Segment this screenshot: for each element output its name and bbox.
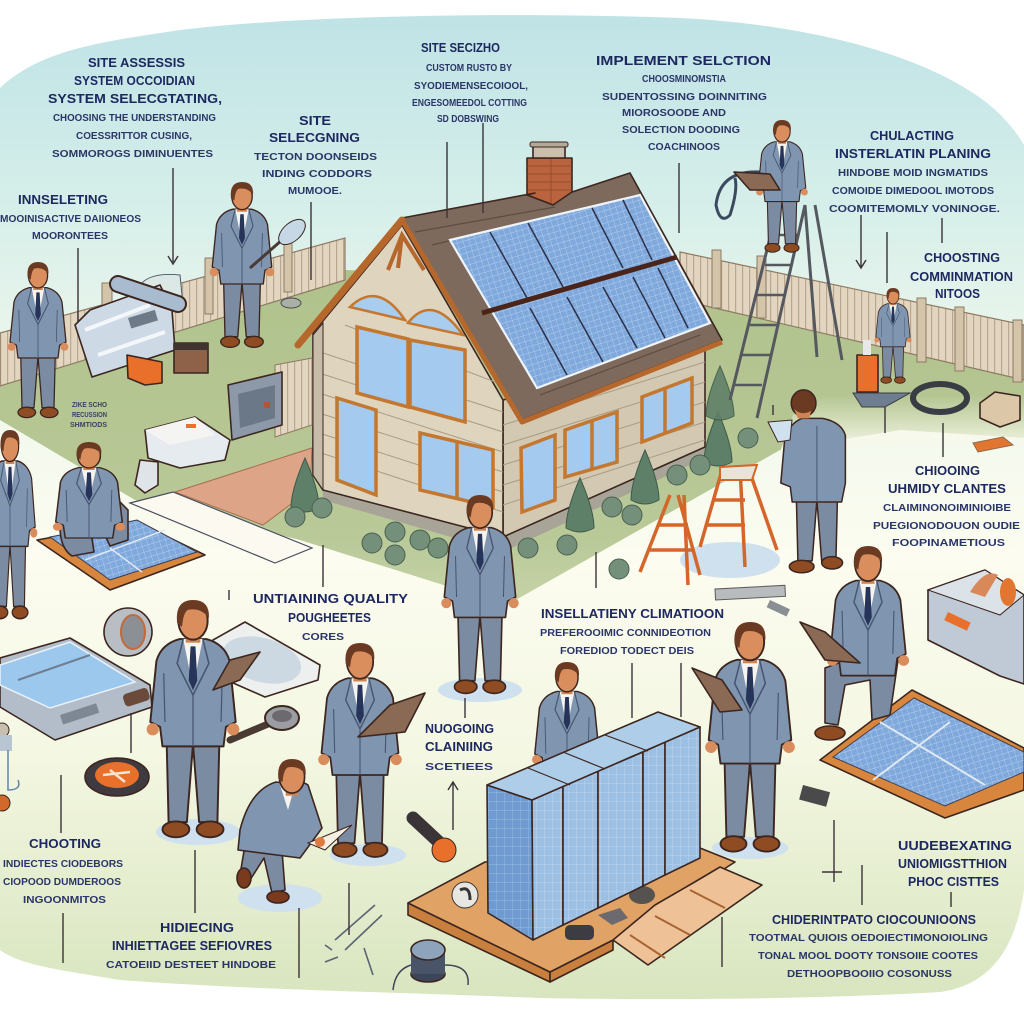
text block: maintaining quality: CORES	[302, 631, 344, 643]
text block: understanding: PHOC CISTTES	[908, 875, 999, 889]
house front wall	[313, 225, 503, 537]
crouching worker	[237, 759, 352, 903]
text block: implement selection: MIOROSOODE AND	[622, 107, 726, 119]
text block: conducting installation planning: INSTERLATIN PLANING	[835, 147, 991, 161]
text block: conducting installation planning: CHULACTING	[870, 129, 954, 143]
text block: nuogoing cleaning: SCETIEES	[425, 761, 493, 773]
worker behind panels	[532, 662, 602, 772]
text block: conducting installation planning: COMOIDE DIMEDOOL IMOTODS	[832, 185, 994, 197]
text block: conducting installation planning: HINDOBE MOID INGMATIDS	[838, 167, 988, 179]
stacked solar panels	[487, 712, 700, 940]
text block: site selecting: INDING CODDORS	[262, 168, 372, 180]
gable struts	[388, 235, 424, 270]
text block: choosing communication needs	[910, 251, 1013, 301]
text block: conducting installation planning: COOMITEMOMLY VONINOGE.	[829, 203, 1000, 215]
text block: installation climate: INSELLATIENY CLIMATIOON	[541, 607, 724, 621]
text block: implement selection: SUDENTOSSING DOINNITING	[602, 91, 767, 103]
text block: site seizing: SITE SECIZHO	[421, 41, 500, 55]
text block: site assessment: SYSTEM SELECGTATING,	[48, 92, 222, 106]
foundation gravel	[323, 445, 705, 552]
text block: site seizing	[412, 41, 528, 125]
cable reel	[393, 940, 468, 990]
inverter box left	[0, 638, 152, 740]
worker with magnifier	[210, 182, 310, 347]
text block: choosing utility clamps: PUEGIONODOUON OUDIE	[873, 520, 1020, 532]
text block: site assessment: SYSTEM OCCOIDIAN	[74, 74, 195, 88]
text block: understanding: UUDEBEXATING	[898, 839, 1012, 853]
worker on ladder	[716, 120, 808, 252]
left edge tool	[0, 723, 19, 811]
side note text near equipment: ZIKE SCHO	[72, 402, 107, 409]
text block: site assessment: COESSRITTOR CUSING,	[76, 130, 192, 142]
text block: site assessment: SITE ASSESSIS	[88, 56, 185, 70]
house side wall	[503, 345, 705, 537]
text block: site seizing: SD DOBSWING	[437, 113, 499, 125]
text block: conditions and costs: TONAL MOOL DOOTY TONSOIIE COOTES	[758, 950, 978, 962]
text block: site selecting: SELECGNING	[269, 131, 360, 145]
front windows	[337, 327, 493, 507]
kneeling workers	[53, 442, 909, 903]
ground solar panel right	[820, 690, 1024, 818]
foot shadows	[156, 678, 788, 912]
wooden base	[408, 848, 762, 982]
kneeling worker left	[53, 442, 128, 556]
text block: site assessment: SOMMOROGS DIMINUENTES	[52, 148, 213, 160]
house	[298, 142, 722, 552]
text block: choosing bottom left: INDIECTES CIODEBORS	[3, 858, 123, 870]
text block: choosing communication needs: CHOOSTING	[924, 251, 1000, 265]
text block: choosing utility clamps: UHMIDY CLANTES	[888, 482, 1006, 496]
text block: maintaining quality: POUGHEETES	[288, 611, 371, 625]
centre worker	[441, 495, 519, 693]
annotation lines	[61, 123, 951, 978]
text block: hidiecing inheritance: CATOEIID DESTEET HINDOBE	[106, 959, 276, 971]
walkway slab	[130, 492, 312, 563]
orange disc	[85, 758, 149, 796]
text block: conditions and costs: TOOTMAL QUIOIS OEDOIECTIMONOIOLING	[749, 932, 988, 944]
flashlight	[413, 818, 456, 862]
text block: conditions and costs: CHIDERINTPATO CIOCOUNIOONS	[772, 913, 976, 927]
fence: right	[680, 250, 1024, 382]
text block: installing	[0, 193, 141, 242]
wrench	[230, 706, 299, 740]
worker with clipboard C	[692, 622, 795, 852]
text block: site assessment	[48, 56, 222, 160]
text block: hidiecing inheritance	[106, 921, 276, 971]
kneeling worker with clipboard	[800, 546, 909, 740]
upper arched windows	[350, 296, 463, 335]
cable roll	[104, 608, 152, 656]
text block: installing: MOOINISACTIVE DAIIONEOS	[0, 213, 141, 225]
text block: choosing bottom left	[3, 837, 123, 906]
text block: installation climate: PREFEROOIMIC CONNIDEOTION	[540, 627, 711, 639]
ground solar panel left	[37, 520, 205, 590]
text block: understanding	[898, 839, 1012, 889]
text block: conditions and costs: DETHOOPBOOIIO COSONUSS	[787, 968, 952, 980]
text block: conditions and costs	[749, 913, 988, 980]
text block: choosing utility clamps: CHIOOING	[915, 464, 980, 478]
worker far right	[857, 288, 912, 392]
battery box right	[928, 570, 1024, 684]
text block: installing: INNSELETING	[18, 193, 108, 207]
text block: choosing utility clamps: FOOPINAMETIOUS	[892, 537, 1005, 549]
worker far left	[8, 262, 68, 418]
site stand	[281, 298, 301, 308]
solar panels on roof	[450, 195, 710, 388]
small scrap parts right	[715, 585, 830, 807]
text block: choosing communication needs: COMMINMATION	[910, 270, 1013, 284]
text block: nuogoing cleaning: CLAINIING	[425, 740, 493, 754]
text block: nuogoing cleaning: NUOGOING	[425, 722, 494, 736]
text block: hidiecing inheritance: HIDIECING	[160, 921, 234, 935]
garden path	[175, 448, 312, 525]
text block: installation climate	[540, 607, 724, 657]
white basin	[213, 622, 320, 697]
printer and monitor units	[135, 358, 312, 493]
roof	[402, 173, 722, 420]
text block: implement selection: IMPLEMENT SELCTION	[596, 54, 771, 68]
text block: site assessment: CHOOSING THE UNDERSTANDING	[53, 112, 216, 124]
shrubs	[285, 366, 758, 579]
text block: maintaining quality	[253, 592, 409, 643]
chimney	[527, 142, 572, 205]
text block: implement selection: COACHINOOS	[648, 141, 720, 153]
text block: site seizing: SYODIEMENSECOIOOL,	[414, 80, 528, 92]
side windows	[521, 378, 692, 512]
workers: standing	[0, 120, 912, 857]
worker with clipboard B	[318, 643, 425, 857]
worker with clipboard A	[147, 600, 260, 837]
text block: choosing utility clamps	[873, 464, 1020, 549]
text block: choosing bottom left: CIOPOOD DUMDEROOS	[3, 876, 121, 888]
text block: site selecting: MUMOOE.	[288, 185, 342, 197]
text block: choosing bottom left: INGOONMITOS	[23, 894, 106, 906]
text block: choosing utility clamps: CLAIMINONOIMINIOIBE	[883, 502, 1011, 514]
lawn	[0, 270, 1024, 605]
text block: site seizing: CUSTOM RUSTO BY	[426, 62, 512, 74]
text block: maintaining quality: UNTIAINING QUALITY	[253, 592, 409, 606]
text block: site selecting: SITE	[299, 114, 331, 128]
tools near base	[325, 905, 382, 975]
worker left edge	[0, 430, 37, 619]
big ladder	[730, 205, 842, 418]
text block: site seizing: ENGESOMEEDOL COTTING	[412, 97, 527, 109]
worker reading right	[768, 390, 845, 573]
text block: site selecting	[254, 114, 377, 197]
text block: site selecting: TECTON DOONSEIDS	[254, 151, 377, 163]
text block: implement selection: CHOOSMINOMSTIA	[642, 73, 726, 85]
text block: conducting installation planning	[829, 129, 1000, 215]
side note text near equipment: RECUSSION	[72, 412, 107, 419]
text block: implement selection	[596, 54, 771, 153]
side note text near equipment: SHMTIODS	[70, 422, 107, 429]
text block: hidiecing inheritance: INHIETTAGEE SEFIOVRES	[112, 939, 272, 953]
side note text near equipment	[70, 402, 107, 429]
text block: nuogoing cleaning	[425, 722, 494, 773]
text block: understanding: UNIOMIGSTTHION	[898, 857, 1007, 871]
yard supplies right	[853, 384, 1020, 452]
text block: installing: MOORONTEES	[32, 230, 108, 242]
fence: left	[0, 236, 345, 386]
orange step ladders	[640, 465, 780, 585]
text block: installation climate: FOREDIOD TODECT DEIS	[560, 645, 694, 657]
gable fascia	[298, 220, 402, 345]
equipment cluster	[75, 274, 208, 385]
text block: choosing bottom left: CHOOTING	[29, 837, 101, 851]
text block: choosing communication needs: NITOOS	[935, 287, 980, 301]
text block: implement selection: SOLECTION DOODING	[622, 124, 740, 136]
lawn fade on the right	[780, 395, 1024, 452]
